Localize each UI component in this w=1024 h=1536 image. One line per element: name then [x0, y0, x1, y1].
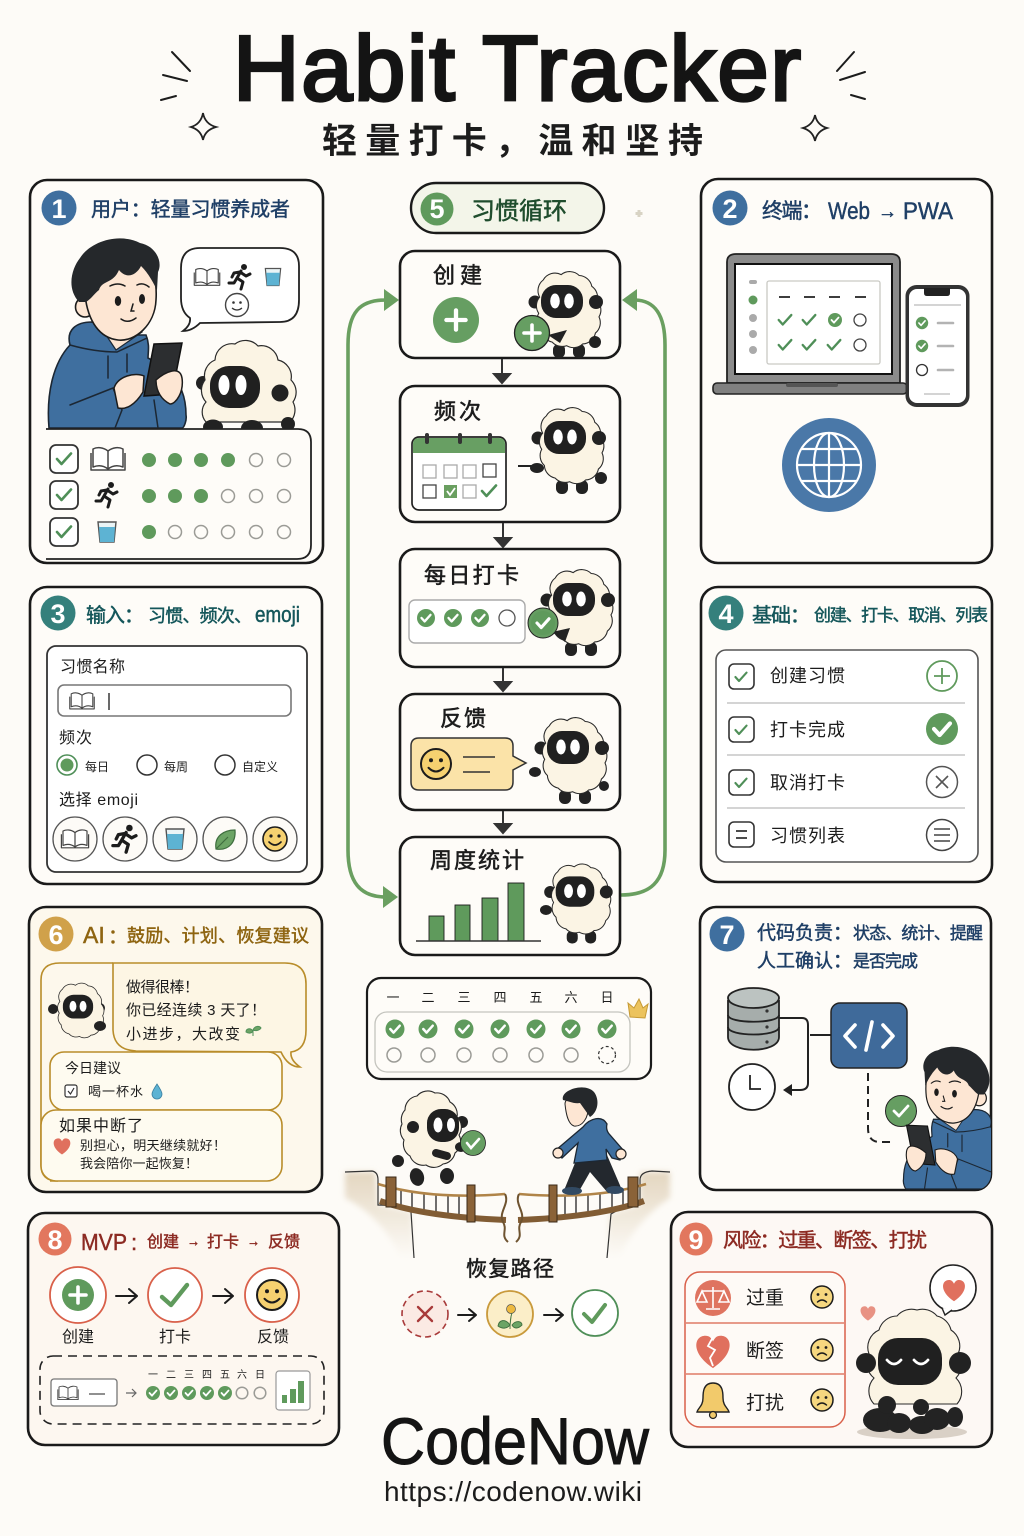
- title: Habit Tracker: [233, 18, 801, 120]
- arrow down: [495, 668, 511, 691]
- day labels: 一: [386, 990, 400, 1005]
- day labels: 五: [529, 990, 543, 1005]
- sheep: [529, 718, 609, 804]
- heading 8 flow: 反馈: [268, 1233, 300, 1251]
- suggestion box: [50, 1052, 282, 1110]
- check row: [386, 1020, 616, 1038]
- heading 8 flow: 创建: [147, 1233, 179, 1251]
- badge 6: 6: [48, 920, 64, 950]
- interruption box: 我会陪你一起恢复！: [80, 1156, 198, 1171]
- label emoji: 选择 emoji: [59, 791, 138, 809]
- figure: man confirming: [902, 1046, 991, 1190]
- recovery label: 恢复路径: [466, 1258, 554, 1281]
- row: list: [729, 820, 958, 850]
- step: feedback: 反馈: [257, 1328, 289, 1346]
- left bridge half: [378, 1177, 508, 1242]
- icon: confirmed check: [886, 1096, 916, 1126]
- bar chart: [416, 883, 541, 941]
- step: feedback: [245, 1268, 299, 1346]
- sheep on bridge: [392, 1091, 486, 1188]
- day labels: 三: [457, 990, 471, 1005]
- label: 周度统计: [430, 848, 524, 873]
- icon: globe: [782, 418, 876, 512]
- flow card: weekly stats: [400, 837, 620, 955]
- row: run: [50, 481, 290, 509]
- step: create: [50, 1267, 106, 1346]
- interruption box: 别担心，明天继续就好！: [80, 1138, 226, 1153]
- heading 4: [752, 604, 988, 627]
- heading 7 line 1: [757, 922, 983, 944]
- icon: plus: [433, 297, 479, 343]
- chat bubble: 小进步，大改变: [126, 1026, 240, 1043]
- panel 1: user: [30, 180, 323, 563]
- row: overload: 过重: [746, 1287, 784, 1309]
- heading 3: emoji: [255, 602, 300, 627]
- row: water: [50, 518, 290, 546]
- badge 7: 7: [719, 920, 735, 950]
- man walking: [553, 1087, 626, 1195]
- habit tracker inner panel: [32, 429, 311, 559]
- badge 5: 5: [429, 194, 445, 224]
- mini chart: [276, 1371, 310, 1410]
- arrow to clock: [783, 1084, 792, 1096]
- arrow down: [495, 811, 511, 833]
- chat bubble: 你已经连续 3 天了！: [126, 1002, 266, 1019]
- label: 频次: [434, 399, 481, 424]
- sheep sitting: [856, 1309, 971, 1439]
- label: 创建: [433, 263, 482, 288]
- phone: [906, 285, 970, 407]
- risk list: [685, 1272, 845, 1427]
- suggestion box: 喝一杯水: [88, 1084, 143, 1099]
- panel 4: basics: [701, 587, 992, 882]
- left loop path: [348, 300, 386, 897]
- day labels: 四: [493, 990, 507, 1005]
- badge 3: 3: [50, 599, 66, 629]
- speech bubble with habit icons: [181, 248, 299, 331]
- bridge scene: [345, 1087, 670, 1258]
- heading 3: 习惯、频次、: [148, 606, 252, 626]
- check step: [572, 1290, 618, 1336]
- day labels: 二: [421, 990, 435, 1005]
- heading 5: 习惯循环: [471, 198, 567, 225]
- sheep: [540, 864, 613, 944]
- week mini: 六: [237, 1369, 247, 1381]
- row: disturb: [697, 1383, 833, 1418]
- heading 2: Web: [828, 198, 870, 225]
- week mini: 一: [148, 1370, 158, 1381]
- feedback bubble: [411, 738, 526, 790]
- week mini: [146, 1369, 266, 1400]
- row: broken: [696, 1336, 833, 1368]
- badge 4: 4: [718, 599, 734, 629]
- panel 2: terminal: [701, 179, 992, 563]
- dashed flow box: [40, 1356, 324, 1424]
- badge 6: [38, 916, 74, 952]
- heading 8 flow: 打卡: [207, 1233, 239, 1251]
- label frequency: 频次: [59, 729, 92, 747]
- flow card: feedback: [400, 694, 620, 810]
- cliffs: [345, 1171, 670, 1258]
- heading 2: [762, 198, 953, 225]
- panel 6: AI: [29, 907, 322, 1192]
- week mini: 三: [184, 1370, 194, 1381]
- radio options: 每周: [164, 759, 188, 774]
- connector: [779, 1018, 831, 1090]
- week mini: 二: [166, 1370, 176, 1381]
- badge 7: [710, 916, 744, 952]
- radio options: 自定义: [242, 759, 278, 774]
- label name: 习惯名称: [60, 658, 125, 676]
- dashed link: [868, 1073, 892, 1142]
- week panel: [367, 978, 651, 1079]
- day labels: 日: [600, 990, 614, 1005]
- badge 1: [42, 190, 76, 226]
- arrow down: [495, 523, 511, 547]
- flow card: daily check-in: [400, 549, 620, 667]
- heading 6: ：: [108, 926, 128, 948]
- heading 6: [83, 922, 309, 948]
- row: create: [729, 661, 957, 691]
- badge 2: 2: [722, 194, 738, 224]
- row: create: 创建习惯: [770, 666, 845, 686]
- flow card: frequency: [400, 386, 620, 522]
- code box: [831, 1003, 907, 1068]
- row: disturb: 打扰: [746, 1392, 784, 1414]
- chat bubble: 做得很棒！: [126, 979, 199, 996]
- icon: sparkle right: [803, 115, 827, 141]
- form: [47, 646, 307, 872]
- day labels: 六: [564, 990, 578, 1005]
- step: check: 打卡: [159, 1328, 191, 1346]
- icon: clock: [729, 1064, 775, 1110]
- heading 4: 创建、打卡、取消、列表: [814, 606, 988, 625]
- row: check in: [729, 713, 958, 745]
- heading 2: →: [878, 201, 897, 223]
- arrowhead top-left: [384, 289, 399, 311]
- heading 8 flow: →: [247, 1233, 260, 1250]
- week mini: 日: [255, 1370, 265, 1381]
- radio options: 每日: [85, 759, 109, 774]
- week mini: 四: [202, 1370, 212, 1381]
- step: check: [148, 1268, 202, 1346]
- badge 8: 8: [47, 1225, 63, 1255]
- heading 7 line 1: 状态、统计、提醒: [853, 924, 983, 943]
- badge 3: [40, 596, 76, 630]
- icon: database: [728, 988, 779, 1050]
- chat bubble: [113, 963, 306, 1067]
- row: overload: [695, 1280, 833, 1316]
- empty row: [387, 1046, 616, 1064]
- sheep: [514, 272, 603, 358]
- laptop: [713, 254, 907, 394]
- badge 2: [712, 190, 748, 226]
- row: cancel: 取消打卡: [770, 773, 845, 793]
- heading 8 MVP: MVP: [81, 1229, 127, 1255]
- row: broken: 断签: [746, 1340, 784, 1362]
- sheep: [518, 408, 607, 494]
- heading 8 flow: →: [187, 1233, 200, 1250]
- heading 6: 鼓励、计划、恢复建议: [127, 926, 309, 946]
- sheep mascot peeking: [196, 340, 296, 436]
- sprout step: [487, 1291, 533, 1337]
- radio options: [57, 755, 278, 775]
- url: https://codenow.wiki: [384, 1476, 642, 1507]
- arrow: [126, 1389, 136, 1397]
- panel 7: code vs human: [700, 907, 1007, 1190]
- heading 1: 用户：轻量习惯养成者: [91, 198, 290, 221]
- panel 3: input: [30, 587, 322, 884]
- day labels: [386, 990, 614, 1005]
- speech bubble heart: [930, 1265, 976, 1315]
- week mini: 五: [220, 1370, 230, 1381]
- heading 2: PWA: [903, 198, 953, 225]
- label: 反馈: [440, 706, 486, 731]
- heading 7 line 2: [757, 950, 918, 972]
- panel 9: risks: [671, 1212, 992, 1447]
- arrow down: [494, 359, 510, 383]
- subtitle: 轻量打卡，温和坚持: [322, 122, 703, 161]
- flow card: create: [400, 251, 620, 358]
- badge 1: 1: [51, 194, 67, 224]
- heading 7 line 2: 是否完成: [853, 952, 918, 971]
- logo: CodeNow: [381, 1404, 649, 1478]
- right bridge half: [516, 1177, 646, 1242]
- right loop path: [621, 300, 665, 895]
- panel 8: MVP: [28, 1213, 339, 1445]
- heading 9: 风险：过重、断签、打扰: [723, 1229, 927, 1252]
- suggestion box: 今日建议: [65, 1060, 121, 1076]
- arrow: [116, 1289, 137, 1303]
- week dots: [409, 600, 525, 643]
- heading 8 MVP: :: [131, 1230, 137, 1255]
- icon: small heart: [861, 1306, 875, 1321]
- arrow: [544, 1309, 563, 1321]
- decorative dot: [636, 210, 642, 217]
- interruption box: [41, 1110, 282, 1181]
- heading 6: AI: [83, 922, 105, 948]
- arrow: [458, 1309, 476, 1321]
- heading 3: [86, 602, 300, 627]
- icon: sparkle left: [191, 113, 216, 140]
- step: create: 创建: [62, 1328, 94, 1346]
- calendar: [412, 433, 506, 510]
- sheep: [528, 570, 615, 656]
- broken step: [402, 1291, 448, 1337]
- row: list: 习惯列表: [770, 826, 845, 846]
- row: check in: 打卡完成: [770, 720, 845, 740]
- badge 5: [420, 192, 454, 226]
- arrowhead top-right: [622, 289, 637, 311]
- row: cancel: [729, 766, 958, 798]
- arrowhead bottom-left: [383, 886, 398, 908]
- row: read: [50, 445, 290, 473]
- input mini: [51, 1379, 117, 1406]
- heading 2: 终端：: [762, 200, 822, 223]
- emoji options: [53, 817, 297, 861]
- interruption box: 如果中断了: [59, 1117, 143, 1135]
- decorative sparkle lines left: [161, 52, 190, 100]
- icon: crown: [628, 999, 648, 1018]
- badge 8: [38, 1222, 72, 1256]
- heading 8 flow: [147, 1233, 300, 1251]
- input field: [58, 685, 291, 716]
- outer frame: [41, 963, 113, 1181]
- recovery path icons: [402, 1290, 618, 1337]
- heading 4: 基础：: [752, 604, 810, 627]
- badge 9: [680, 1222, 712, 1256]
- figure: man with phone: [48, 238, 186, 428]
- label: 每日打卡: [424, 563, 519, 588]
- panel 5 heading pill: [411, 183, 604, 233]
- sheep avatar: [48, 983, 106, 1038]
- decorative sparkle lines right: [837, 52, 865, 99]
- heading 7 line 2: 人工确认：: [757, 950, 852, 972]
- heading 7 line 1: 代码负责：: [757, 922, 852, 944]
- feature list: [716, 650, 978, 862]
- heading 3: 输入：: [86, 604, 144, 627]
- badge 9: 9: [688, 1225, 704, 1255]
- loop arrows: [348, 300, 665, 897]
- arrow: [213, 1289, 233, 1303]
- badge 4: [708, 596, 744, 630]
